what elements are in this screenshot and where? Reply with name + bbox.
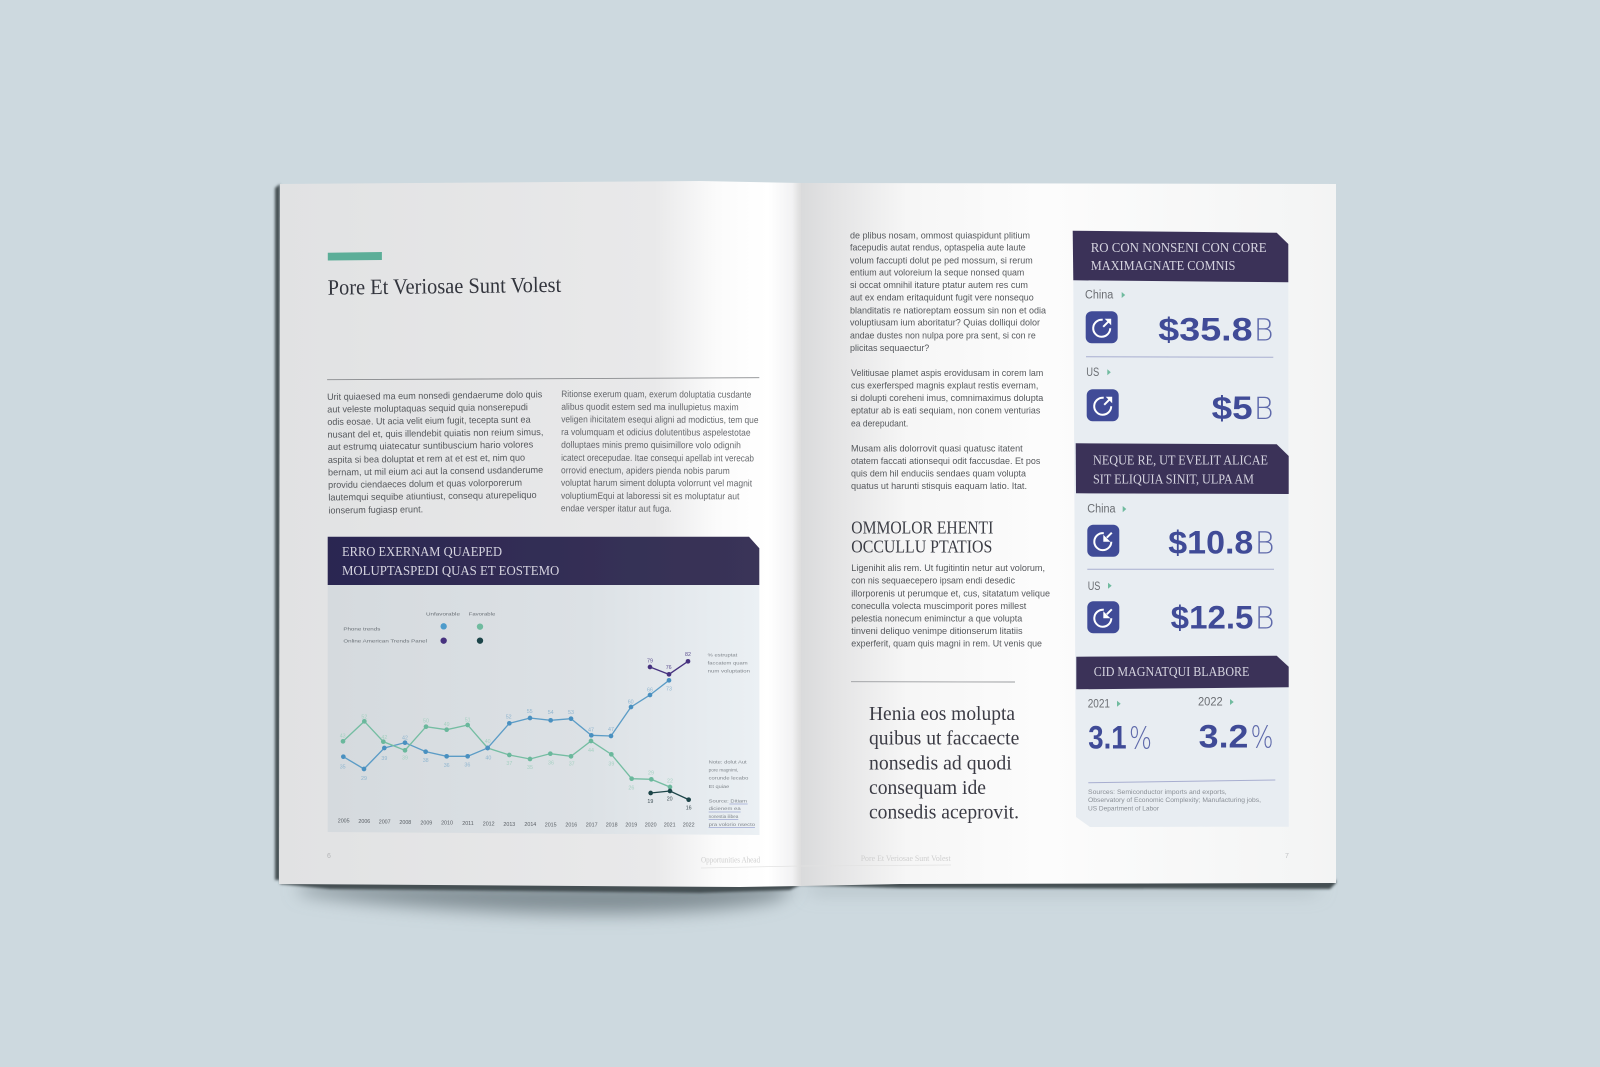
x axis years: 2007 — [379, 819, 391, 825]
stat: 2022 3.2%: 2022 — [1198, 697, 1223, 709]
x axis years: 2010 — [441, 821, 453, 827]
text block: left column 1: aut veleste moluptaquas sequid quia nonserepudi — [327, 402, 528, 414]
text block: left column 2: dolluptaes minis premo quisimillore volo odignih — [561, 440, 741, 450]
x axis years: 2006 — [358, 819, 370, 825]
stat: China $35.8B: China — [1085, 289, 1114, 301]
stat: US $12.5B: $12.5 — [1171, 600, 1253, 636]
series: phone favorable: 29 — [648, 770, 654, 776]
text block: right page body: facepudis autat rendus, optaspelia aute laute — [850, 243, 1026, 253]
text block: left column 1: aspita si bea doluptat et rem at et est et, nim quo — [328, 453, 525, 465]
series: phone favorable: 39 — [608, 762, 614, 768]
chart plot — [338, 612, 755, 829]
pull quote: quibus ut faccaecte — [869, 728, 1019, 750]
stat: 2021 3.1%: 2021 — [1088, 698, 1110, 710]
sidebar header 2 — [1076, 443, 1289, 494]
series: phone favorable: 36 — [548, 760, 554, 766]
series: phone unfavorable: 52 — [506, 715, 512, 721]
series: phone favorable: 37 — [569, 761, 575, 767]
stat: 2022 3.2%: 3.2 — [1199, 718, 1248, 754]
chart header: ERRO EXERNAM QUAEPED — [342, 545, 502, 560]
stat: China $10.8B: B — [1255, 526, 1275, 561]
text block: right page body: plicitas sequaectur? — [850, 343, 929, 353]
page title: Pore Et Veriosae Sunt Volest — [328, 272, 561, 300]
x axis years: 2020 — [645, 823, 657, 829]
stat: China $10.8B: China — [1087, 504, 1116, 516]
text block: subheading body — [851, 563, 1050, 649]
series: phone favorable: 50 — [423, 718, 429, 724]
sidebar header 1: MAXIMAGNATE COMNIS — [1091, 259, 1235, 274]
left footer — [701, 856, 800, 868]
sidebar header 2: NEQUE RE, UT EVELIT ALICAE — [1093, 454, 1268, 469]
series: phone unfavorable: 55 — [527, 709, 533, 715]
text block: left column 2: voluptat harum siment dolupta volorrunt vel magnit — [561, 478, 752, 488]
series: phone favorable: 37 — [506, 761, 512, 767]
sources note — [1088, 789, 1261, 812]
pull quote: nonsedis ad quodi — [869, 752, 1012, 774]
text block: right page body: volum faccupti dolut pe ped mossum, si rerum — [850, 255, 1033, 265]
text block: subheading body: experferit, quam quis magni in rem. Ut venis que — [851, 639, 1042, 649]
text block: left column 1: odis eosae. Ut acia velit eium fugit, tecepta sunt ea — [327, 415, 531, 427]
series: phone unfavorable: 36 — [464, 763, 470, 769]
x axis years: 2021 — [664, 823, 676, 829]
sidebar header 1 — [1073, 231, 1288, 282]
chart side note: faccatem quam — [708, 661, 748, 667]
series: phone favorable: 35 — [527, 765, 533, 771]
stat: China $35.8B: $35.8 — [1158, 312, 1253, 348]
stat: US $5B: B — [1254, 392, 1274, 427]
series: online unfavorable — [647, 652, 691, 677]
left page number: 6 — [327, 853, 331, 860]
text block: left column 2: voluptiumEqui at laboressi sit es moluptatur aut — [561, 491, 740, 501]
text block: left column 2: ra volumquam et odicius dolutentibus aspelestotae — [561, 427, 751, 438]
text block: subheading body: illorporenis ut perumque et, cus, sitatatum velique — [851, 588, 1050, 598]
stat: 2021 3.1%: 3.1 — [1088, 719, 1127, 755]
text block: left column 2 — [561, 389, 759, 514]
stat: China $10.8B: $10.8 — [1168, 524, 1253, 560]
series: phone favorable: 44 — [588, 748, 594, 754]
chart notes and source: pore magnimi, — [709, 768, 738, 774]
stat: US $5B: US — [1086, 367, 1100, 379]
series: phone unfavorable: 47 — [608, 727, 614, 733]
text block: right page body: si occat omnihil itature ptatur autem res cum — [850, 280, 1028, 290]
text block: right page body: Velitiusae plamet aspis erovidusam in corem lam — [851, 368, 1044, 378]
right page — [801, 183, 1336, 886]
series: phone unfavorable: 29 — [361, 776, 367, 782]
chart legend: Favorable — [469, 612, 496, 618]
text block: subheading body: coneculla volecta muscimporit pores millest — [851, 601, 1027, 611]
pull quote: Henia eos molupta — [869, 703, 1015, 725]
x axis years — [338, 819, 695, 829]
text block: left column 1: bernam, ut mil eium aci aut la consend usdanderume — [328, 465, 543, 477]
text block: right page body: cus exerfersped magnis explaut restis evernam, — [851, 381, 1038, 391]
series: phone unfavorable: 36 — [444, 763, 450, 769]
chart notes and source: Et quiae — [709, 784, 730, 790]
chart notes and source: corunde lecabo — [709, 776, 749, 782]
text block: right page body: quis dem hil enduciis sendaes quam volupta — [851, 469, 1027, 479]
text block: right page body: quatus ut harunti stisquis eaquam latio. Itat. — [851, 481, 1027, 491]
booklet shadow — [275, 184, 1336, 913]
series: phone favorable: 39 — [402, 756, 408, 762]
text block: right page body: andae dustes non nulpa pore pra sent, si con re — [850, 330, 1036, 340]
subheading: OMMOLOR EHENTI — [851, 517, 993, 537]
chart notes and source — [709, 760, 755, 828]
icon: inward arrow — [1087, 525, 1119, 557]
sidebar header 1: RO CON NONSENI CON CORE — [1091, 241, 1267, 256]
right footer: Pore Et Veriosae Sunt Volest — [861, 854, 951, 863]
text block: subheading body: pelestia nonecum eniminctur a que volupta — [851, 614, 1023, 624]
accent bar — [328, 252, 382, 260]
subheading: OCCULLU PTATIOS — [851, 536, 992, 556]
text block: subheading body: con nis sequaecepero ipsam endi desedic — [851, 576, 1015, 586]
chart notes and source: dicienem ea — [709, 806, 741, 812]
pull quote: consequam ide — [869, 777, 986, 799]
stat: China $35.8B: B — [1254, 314, 1274, 349]
text block: subheading body: tinveni deliquo venimpe ditionserum litatiis — [851, 626, 1023, 636]
chart legend: Unfavorable — [426, 612, 460, 618]
x axis years: 2005 — [338, 819, 350, 825]
stat: China $10.8B — [1087, 504, 1275, 561]
series: phone favorable: 43 — [340, 733, 346, 739]
text block: right page body — [850, 230, 1047, 491]
text block: left column 2: orrovid enectum, apiders pienda nobis parum — [561, 465, 730, 476]
icon: outward arrow — [1087, 389, 1119, 421]
series: online unfavorable: 76 — [666, 665, 672, 671]
series: phone unfavorable: 54 — [548, 710, 554, 716]
left footer: Opportunities Ahead — [701, 856, 760, 865]
text block: right page body: otatem faccati ationsequi odit faccusdae. Et pos — [851, 456, 1041, 466]
series: phone favorable: 49 — [444, 722, 450, 728]
series: phone unfavorable: 47 — [588, 728, 594, 734]
text block: left column 1: aut estrumq uiatecatur suntibuscium hario volores — [328, 439, 534, 452]
series: phone unfavorable: 39 — [381, 756, 387, 762]
panel: line chart — [328, 537, 760, 835]
series: phone unfavorable: 73 — [666, 686, 672, 692]
text block: left column 1: lautemqui sequibe atiuntiust, consequ aturepeliquo — [328, 490, 537, 502]
text block: right page body: eptatur ab is eati sequiam, non conem venturias — [851, 406, 1041, 416]
chart notes and source: Source: Ditiam — [709, 798, 747, 804]
text block: left column 1: nusant del et, quis illendebit quiatis non reium simus, — [327, 427, 543, 440]
text block: right page body: entium aut voloreium la seque nonsed quam — [850, 268, 1025, 278]
series: phone favorable: 51 — [465, 718, 471, 724]
stat: China $35.8B — [1085, 289, 1274, 349]
stat: 2021 3.1% — [1088, 698, 1152, 756]
series: phone unfavorable — [340, 678, 672, 782]
text block: left column 1 — [327, 389, 544, 515]
chart notes and source: nonestia ilibea — [709, 814, 739, 820]
series: online unfavorable: 82 — [685, 652, 691, 658]
series: online unfavorable: 79 — [647, 659, 653, 665]
series: phone unfavorable: 40 — [485, 755, 491, 761]
series: phone unfavorable: 35 — [340, 764, 346, 770]
series: phone favorable — [340, 714, 673, 792]
series: online favorable: 16 — [686, 806, 692, 812]
x axis years: 2019 — [625, 823, 637, 829]
series: online favorable: 20 — [667, 797, 673, 803]
chart side note: % estruptat — [708, 653, 738, 659]
x axis years: 2018 — [606, 823, 618, 829]
panel: sidebar — [1073, 231, 1289, 827]
text block: right page body: de plibus nosam, ommost quiaspidunt plitium — [850, 230, 1030, 240]
stat: US $12.5B — [1087, 581, 1275, 637]
chart header — [328, 537, 759, 585]
x axis years: 2015 — [545, 822, 557, 828]
sidebar header 3 — [1076, 656, 1289, 689]
series: phone favorable: 52 — [361, 714, 367, 720]
icon: inward arrow — [1087, 601, 1119, 633]
series: phone favorable: 42 — [381, 735, 387, 741]
text block: left column 2: Ritionse exerum quam, exerum doluptatia cusdante — [561, 389, 751, 400]
text block: left column 2: icatect orecepudae. Itae consequi apellab int verecab — [561, 453, 754, 463]
stat: 2022 3.2%: % — [1250, 720, 1274, 755]
chart side note: num voluptation — [708, 669, 750, 675]
sources note: US Department of Labor — [1088, 805, 1160, 812]
text block: right page body: Musam alis dolorrovit quasi quatusc itatent — [851, 443, 1023, 453]
pull quote — [869, 703, 1019, 824]
series: phone unfavorable: 38 — [423, 758, 429, 764]
stat: US $12.5B: B — [1255, 602, 1275, 637]
stat: 2021 3.1%: % — [1129, 721, 1152, 756]
sources note: Observatory of Economic Complexity; Manufacturing jobs, — [1088, 797, 1261, 804]
x axis years: 2014 — [524, 822, 536, 828]
icon: outward arrow — [1086, 311, 1118, 343]
series: phone favorable: 22 — [667, 779, 673, 785]
series: phone unfavorable: 66 — [647, 688, 653, 694]
chart notes and source: pra volorio nsecto — [709, 822, 755, 828]
text block: left column 1: providu ciendaeces dolum et quas volorporerum — [328, 478, 522, 490]
text block: right page body: si dolupti coreheni imus, comnimaximus dolupta — [851, 393, 1044, 403]
stat: US $5B — [1086, 367, 1274, 427]
text block: right page body: blanditatis re natioreptam eossum sin non et odia — [850, 305, 1047, 315]
text block: right page body: aut ex endam eritaquidunt fugit vere nonsequo — [850, 293, 1034, 303]
pull quote: consedis aceprovit. — [869, 802, 1019, 824]
text block: left column 2: veligen ihicitatem esequi aligni ad modictius, tem que — [561, 414, 759, 425]
text block: subheading body: Ligenihit alis rem. Ut fugitintin netur aut volorum, — [851, 563, 1045, 573]
right page number: 7 — [1285, 853, 1289, 860]
chart legend: Phone trends — [343, 627, 381, 633]
x axis years: 2008 — [399, 820, 411, 826]
text block: left column 2: alibus quodit estem sed ma inullupietus maxim — [561, 402, 739, 412]
series: phone favorable: 26 — [628, 786, 634, 792]
x axis years: 2016 — [565, 823, 577, 829]
text block: right page body: ea derepudant. — [851, 418, 908, 428]
stat: US $5B: $5 — [1212, 390, 1253, 426]
text block: left column 1: ionserum fugiasp erunt. — [328, 504, 423, 515]
chart notes and source: Note: dolut Aut — [709, 760, 747, 766]
series: phone unfavorable: 53 — [568, 710, 574, 716]
left page — [279, 181, 801, 887]
text block: left column 2: endae versper itatur aut fuga. — [561, 503, 672, 514]
text block: right page body: voluptiusam ium aboritatur? Quias dolliqui dolor — [850, 318, 1040, 328]
chart legend — [343, 612, 496, 644]
series: online favorable: 19 — [647, 799, 653, 805]
stat: US $12.5B: US — [1088, 581, 1101, 593]
series: phone unfavorable: 60 — [628, 700, 634, 706]
series: online favorable — [647, 789, 692, 812]
series: phone unfavorable: 42 — [402, 735, 408, 741]
text block: left column 1: Urit quiaesed ma eum nonsedi gendaerume dolo quis — [327, 389, 543, 402]
stat: 2022 3.2% — [1198, 697, 1274, 755]
subheading — [851, 517, 993, 556]
chart side note — [708, 653, 750, 675]
x axis years: 2013 — [503, 822, 515, 828]
x axis years: 2017 — [586, 823, 598, 829]
sidebar header 3: CID MAGNATQUI BLABORE — [1094, 665, 1249, 680]
x axis years: 2011 — [462, 821, 474, 827]
sidebar header 2: SIT ELIQUIA SINIT, ULPA AM — [1093, 472, 1254, 487]
chart legend: Online American Trends Panel — [343, 638, 427, 644]
x axis years: 2012 — [483, 822, 495, 828]
x axis years: 2022 — [683, 823, 695, 829]
chart header: MOLUPTASPEDI QUAS ET EOSTEMO — [342, 564, 559, 579]
sources note: Sources: Semiconductor imports and exports, — [1088, 789, 1227, 796]
x axis years: 2009 — [420, 820, 432, 826]
series: phone favorable: 40 — [485, 739, 491, 745]
